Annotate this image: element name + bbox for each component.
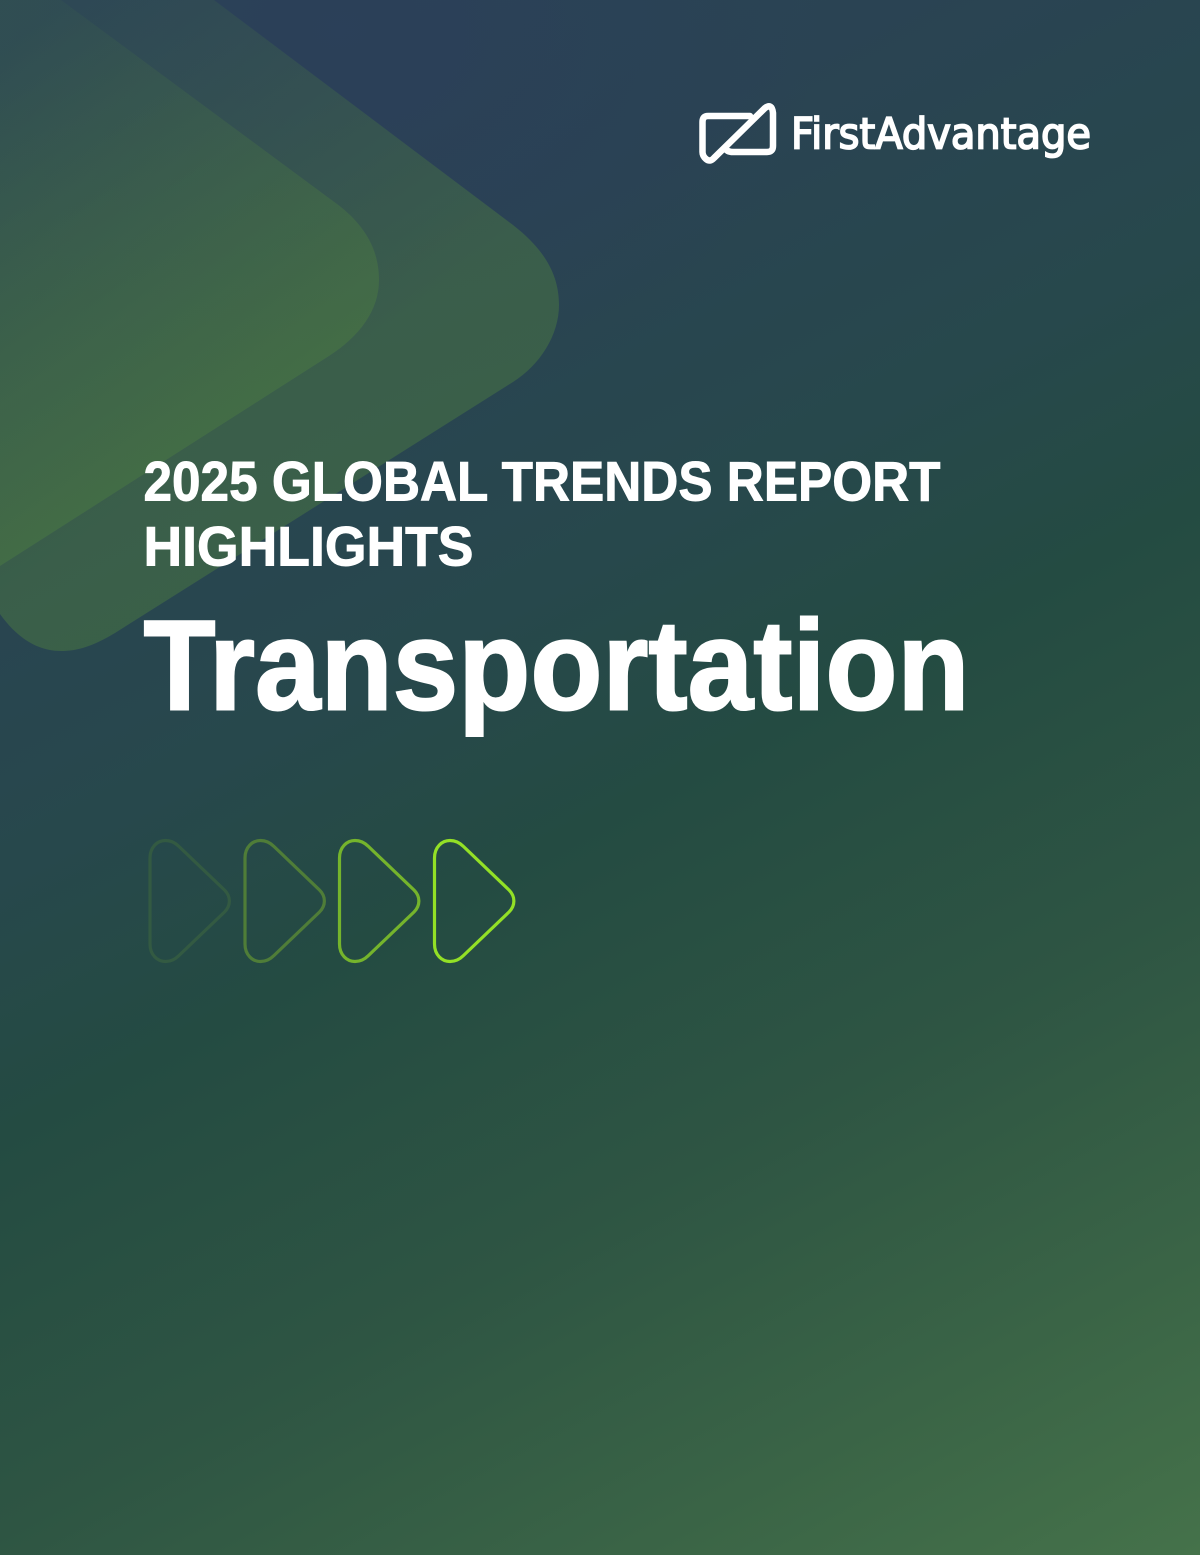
logo wordmark: FirstAdvantage (791, 110, 1091, 160)
logo icon (702, 106, 773, 161)
arrow row (150, 840, 514, 962)
heading: report title: HIGHLIGHTS (144, 514, 474, 578)
arrow 2 (245, 840, 324, 962)
heading: report title (144, 450, 940, 578)
decorative outer arrow shape (0, 0, 559, 651)
heading: Transportation: Transportation (144, 594, 970, 738)
arrow 3 (340, 840, 419, 962)
arrow 4 (434, 840, 514, 962)
arrow 1 (150, 840, 229, 962)
decorative inner arrow shape (0, 0, 379, 566)
heading: report title: 2025 GLOBAL TRENDS REPORT (144, 450, 940, 512)
logo: First Advantage (702, 106, 1091, 161)
